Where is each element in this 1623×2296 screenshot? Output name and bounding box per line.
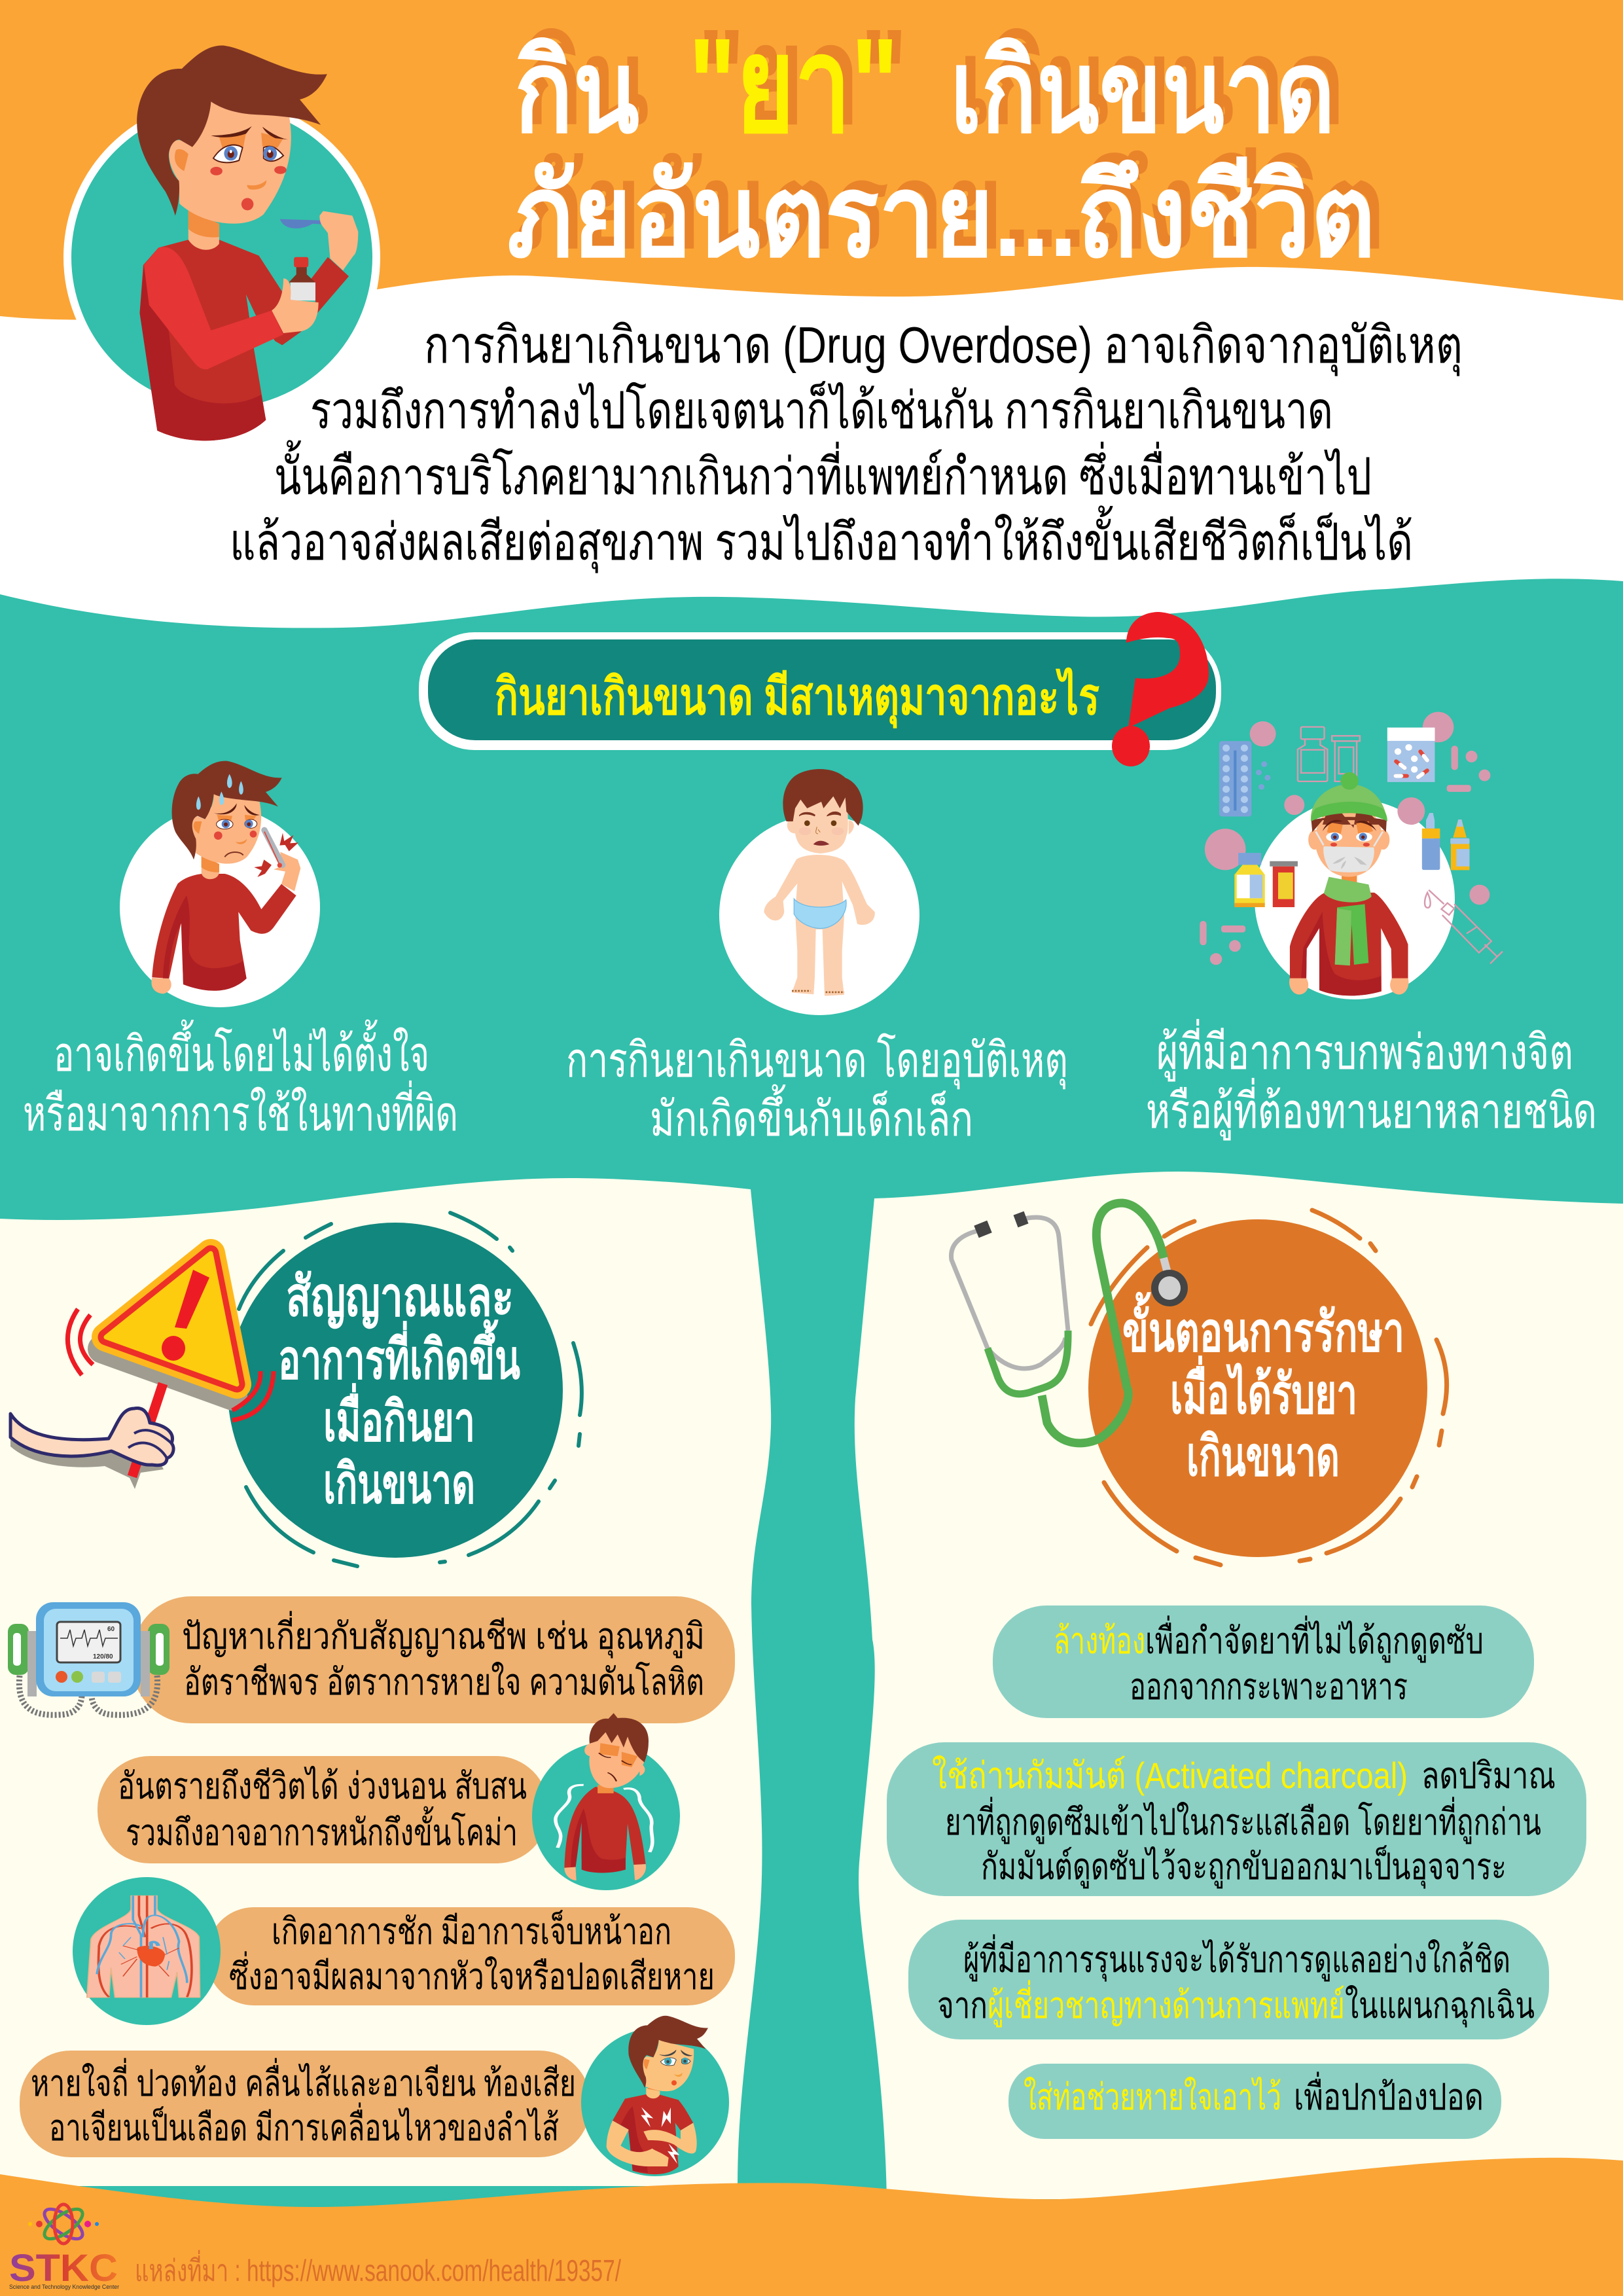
heading: causes pill <box>419 612 1221 766</box>
rough white border <box>419 632 1221 750</box>
icon: child in diaper <box>764 769 875 996</box>
pill text: ล้างท้อง <box>1054 1620 1145 1661</box>
heading text: กินยาเกินขนาด มีสาเหตุมาจากอะไร <box>495 667 1099 728</box>
pill text <box>31 2058 576 2148</box>
teal circle <box>581 2028 729 2176</box>
title <box>507 1 1385 281</box>
pill <box>993 1605 1534 1718</box>
pill <box>132 1596 735 1723</box>
pill <box>908 1920 1549 2039</box>
sign pole <box>132 1384 163 1477</box>
caption: cause 1: หรือมาจากการใช้ในทางที่ผิด <box>23 1080 458 1141</box>
background: cream right panel <box>855 1172 1623 2199</box>
pill text <box>932 1755 1556 1889</box>
caption: cause 1: อาจเกิดขึ้นโดยไม่ได้ตั้งใจ <box>54 1019 429 1081</box>
pill text: อัตราชีพจร อัตราการหายใจ ความดันโลหิต <box>184 1661 704 1702</box>
pill <box>887 1742 1586 1896</box>
pill text: รวมถึงอาจอาการหนักถึงขั้นโคม่า <box>126 1806 518 1853</box>
title text: ภัยอันตราย...ถึงชีวิต <box>507 152 1376 281</box>
icon: main person with medicine <box>67 46 376 440</box>
icon: drowsy person <box>556 1713 652 1880</box>
icon: stethoscope <box>951 1203 1188 1443</box>
caption: cause 2 <box>566 1033 1068 1146</box>
decorative arcs <box>239 1213 582 1566</box>
caption: cause 1 <box>23 1019 458 1141</box>
background: orange footer <box>0 2158 1623 2296</box>
badge text: สัญญาณและ <box>286 1266 514 1330</box>
decorative arcs <box>1091 1210 1447 1565</box>
badge text <box>278 1266 520 1515</box>
pill text <box>118 1765 527 1853</box>
title text: เกินขนาด <box>950 28 1335 156</box>
white circle <box>120 807 320 1007</box>
icon: person with thermometer <box>151 761 300 994</box>
teal circle <box>532 1742 680 1890</box>
source line: แหล่งที่มา : https://www.sanook.com/health/19357/ <box>135 2250 621 2287</box>
panel: symptom 4 <box>20 2016 729 2176</box>
pill text: อาเจียนเป็นเลือด มีการเคลื่อนไหวของลำไส้ <box>49 2102 559 2148</box>
title shadow: กิน <box>524 19 649 147</box>
pill text: เพื่อกำจัดยาที่ไม่ได้ถูกดูดซับ <box>1145 1615 1484 1663</box>
panel: treatment 4 <box>1008 2064 1501 2139</box>
caption: cause 3 <box>1146 1018 1597 1141</box>
pill text: ในแผนกฉุกเฉิน <box>1345 1984 1535 2028</box>
white circle <box>1255 799 1455 999</box>
teal circle <box>228 1223 563 1558</box>
caption: cause 2: การกินยาเกินขนาด โดยอุบัติเหตุ <box>566 1033 1068 1090</box>
badge text: เมื่อกินยา <box>323 1383 475 1452</box>
panel: cause 3 <box>1200 712 1503 999</box>
logo tagline: Science and Technology Knowledge Center <box>9 2284 119 2290</box>
panel: treatment 2 <box>887 1742 1586 1896</box>
pill <box>20 2051 590 2157</box>
pill text: อันตรายถึงชีวิตได้ ง่วงนอน สับสน <box>118 1765 527 1806</box>
badge text: ขั้นตอนการรักษา <box>1122 1291 1404 1363</box>
sign and hand shadow <box>10 1260 233 1489</box>
pill <box>1008 2064 1501 2139</box>
title shadow <box>516 1 1385 272</box>
icon: vital signs monitor: 60 <box>107 1626 115 1633</box>
panel: treatment 3 <box>908 1920 1549 2039</box>
panel: cause 2 <box>719 769 919 1015</box>
pill <box>207 1907 735 2005</box>
title text: "ยา" <box>688 10 899 160</box>
pill text <box>229 1909 715 1997</box>
pill text: เพื่อปกป้องปอด <box>1294 2072 1484 2117</box>
person figure <box>137 46 358 440</box>
logo: STKC <box>9 2204 119 2290</box>
badge text <box>1122 1291 1404 1487</box>
icon: person with mask and scarf <box>1289 772 1408 996</box>
panel: symptom 2 <box>98 1713 680 1890</box>
pill <box>98 1756 548 1863</box>
pill text <box>1054 1615 1484 1707</box>
badge text: เกินขนาด <box>323 1453 475 1515</box>
icon: vital signs monitor: 120/80 <box>93 1653 113 1660</box>
heading badge: treatment <box>1088 1210 1447 1565</box>
panel: symptom 3 <box>73 1877 735 2025</box>
background: orange header <box>0 0 1623 655</box>
panel: cause 1 <box>120 761 320 1007</box>
heading badge: symptoms <box>228 1213 582 1566</box>
icon: person with stomach pain <box>607 2016 708 2174</box>
icon: chest anatomy <box>87 1895 200 1998</box>
title text <box>507 10 1376 281</box>
panel: symptom 1 <box>8 1596 735 1723</box>
warning waves <box>67 1309 274 1420</box>
intro text block: รวมถึงการทำลงไปโดยเจตนาก็ได้เช่นกัน การกินยาเกินขนาด <box>310 381 1333 439</box>
logo atom icon <box>28 2204 99 2244</box>
caption: cause 2: มักเกิดขึ้นกับเด็กเล็ก <box>650 1084 973 1146</box>
warning triangle <box>106 1253 237 1384</box>
title shadow: เกินขนาด <box>959 19 1344 147</box>
pill text <box>937 1934 1535 2028</box>
title text: กิน <box>514 28 639 156</box>
orange circle <box>1088 1219 1427 1557</box>
badge text: เกินขนาด <box>1186 1426 1340 1487</box>
arm and fist <box>10 1408 173 1465</box>
badge text: เมื่อได้รับยา <box>1170 1355 1357 1425</box>
logo wordmark: STKC <box>9 2247 118 2289</box>
pill text: จาก <box>937 1984 988 2026</box>
badge text: อาการที่เกิดขึ้น <box>278 1319 520 1390</box>
white circle <box>719 815 919 1015</box>
pill text: ลดปริมาณ <box>1421 1755 1556 1796</box>
icon: red question mark <box>1112 612 1209 766</box>
intro text block <box>230 316 1463 573</box>
pill text <box>182 1611 705 1702</box>
icon: vital signs monitor <box>8 1602 169 1715</box>
pill text: ซึ่งอาจมีผลมาจากหัวใจหรือปอดเสียหาย <box>229 1951 715 1997</box>
pill text: ใส่ท่อช่วยหายใจเอาไว้ <box>1024 2076 1281 2117</box>
pill text <box>1024 2072 1484 2117</box>
pill text: ออกจากกระเพาะอาหาร <box>1130 1666 1408 1707</box>
pill text: เกิดอาการชัก มีอาการเจ็บหน้าอก <box>272 1909 671 1952</box>
pill text: ปัญหาเกี่ยวกับสัญญาณชีพ เช่น อุณหภูมิ <box>182 1611 705 1659</box>
title shadow: "ยา" <box>698 1 908 151</box>
panel: treatment 1 <box>993 1605 1534 1718</box>
pill text: ผู้เชี่ยวชาญทางด้านการแพทย์ <box>988 1980 1345 2028</box>
title shadow: ภัยอันตราย...ถึงชีวิต <box>516 143 1385 272</box>
icons: medicine collection <box>1200 712 1503 965</box>
pill text: หายใจถี่ ปวดท้อง คลื่นไส้และอาเจียน ท้องเสีย <box>31 2058 576 2104</box>
background: teal causes band <box>0 579 1623 2225</box>
icon: hand holding warning sign <box>10 1253 274 1489</box>
teal circle <box>67 103 376 412</box>
pill text: ใช้ถ่านกัมมันต์ (Activated charcoal) <box>932 1755 1408 1796</box>
background: white intro band <box>0 267 1623 655</box>
teal circle <box>73 1877 221 2025</box>
dark pill <box>428 639 1216 740</box>
background: cream left panel <box>0 1178 771 2186</box>
